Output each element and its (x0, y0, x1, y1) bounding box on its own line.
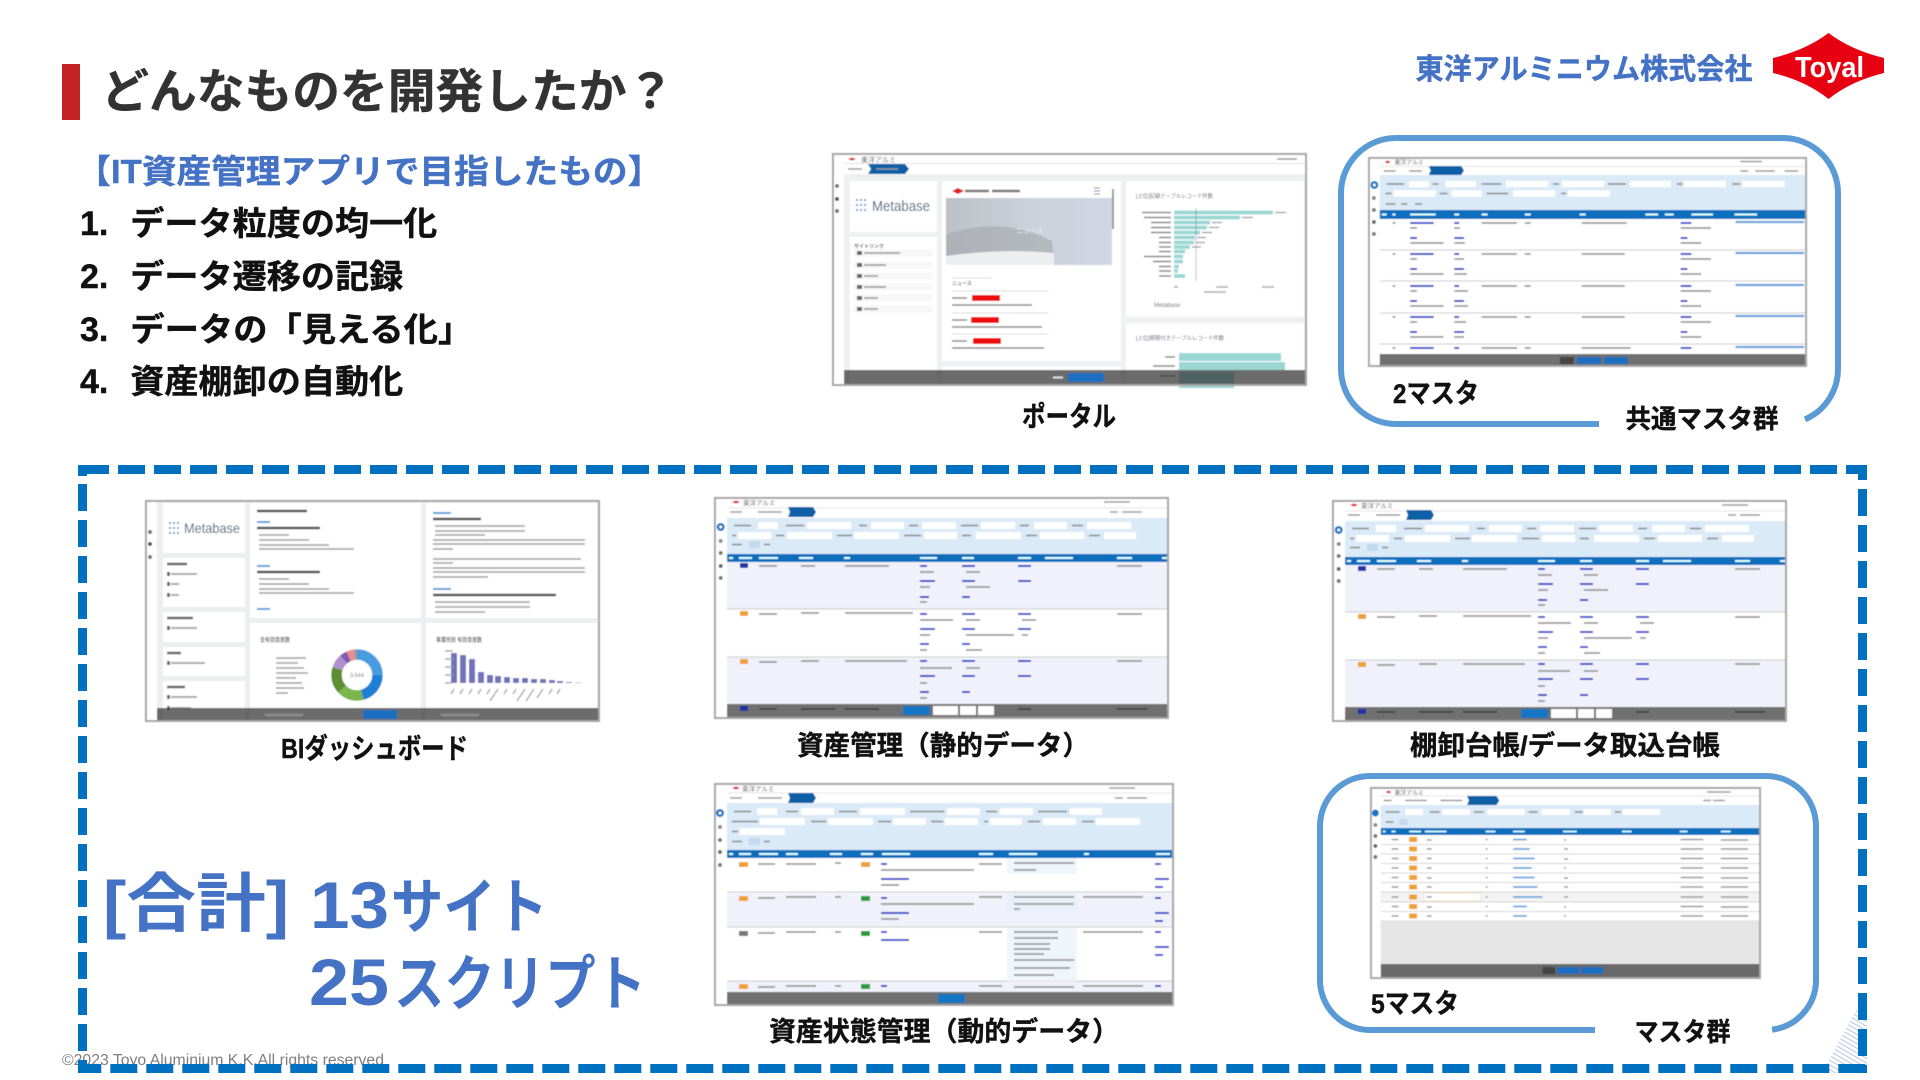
screenshot: asset status management: 東洋アルミ (742, 784, 774, 793)
portal footer overlay (844, 370, 1307, 385)
screenshot: employee master: 東洋アルミ (1394, 158, 1424, 167)
label: asset status management: 資産状態管理（動的データ） (769, 1016, 1119, 1047)
dashboard footer overlay (157, 708, 600, 722)
screenshot: BI dashboard (145, 500, 600, 722)
chart: record counts: Metabase (1154, 303, 1181, 309)
label: inventory ledger: 棚卸台帳/データ取込台帳 (1410, 730, 1720, 761)
chart: total effective assets donut: 3,544 (350, 673, 364, 679)
screenshot: asset management (714, 497, 1169, 719)
chart: period table counts: [上位]期限付きテーブルレコード件数 (1136, 334, 1224, 342)
chart: period table counts (1126, 323, 1304, 386)
screenshot: inventory ledger: 東洋アルミ (1361, 501, 1393, 510)
site links card: サイトリンク (854, 243, 884, 250)
chart: total effective assets donut: 全有効資産数 (260, 636, 290, 644)
screenshot: asset management: 東洋アルミ (743, 498, 775, 507)
news card: ニュース (1016, 227, 1044, 235)
chart: assets by site bars (426, 623, 597, 722)
icon: Toyal logo: Toyal (1795, 52, 1864, 84)
news card: ニュース (952, 281, 972, 287)
panel: dashed border (78, 465, 1867, 1073)
goal 3: 3. (80, 311, 108, 349)
25 scripts: スクリプト (394, 951, 646, 1018)
label: master group: マスタ群 (1634, 1017, 1730, 1047)
panel: asset management (714, 497, 1169, 761)
total label: [合計] (103, 868, 289, 940)
chart: record counts: [上位]記録テーブルレコード件数 (1136, 192, 1213, 200)
callout: total 13 sites 25 scripts (103, 868, 646, 1019)
label: 2 masters: 2マスタ (1393, 379, 1479, 409)
screenshot: inventory ledger (1332, 500, 1787, 722)
goal 4: 資産棚卸の自動化 (130, 363, 403, 400)
title: どんなものを開発したか？ (101, 65, 674, 118)
requests card (426, 503, 597, 618)
subtitle: 【IT資産管理アプリで目指したもの】 (76, 153, 662, 190)
label: 5 masters: 5マスタ (1371, 989, 1459, 1019)
goal 2: データ遷移の記録 (130, 258, 403, 295)
navigation cards (163, 558, 245, 722)
goals list (80, 205, 472, 401)
25 scripts: 25 (309, 945, 389, 1019)
screenshot: asset type master: 東洋アルミ (1395, 789, 1424, 797)
Metabase card: Metabase (872, 199, 930, 215)
panel: asset status management (714, 783, 1174, 1047)
panel: masters (1320, 776, 1816, 1047)
panel: BI dashboard (145, 500, 600, 764)
goal 3: データの「見える化」 (130, 311, 472, 348)
timeline card (250, 503, 421, 618)
chart: total effective assets donut (250, 623, 421, 722)
goal 4: 4. (80, 363, 108, 401)
screenshot: employee master (1368, 157, 1807, 367)
chart: assets by site bars: 事業所別 有効資産数 (436, 636, 482, 644)
site links card (850, 237, 937, 386)
rounded frame (1341, 138, 1838, 424)
panel: inventory ledger (1332, 500, 1787, 761)
Metabase card (850, 181, 937, 232)
panel: portal (832, 153, 1307, 432)
13 sites: 13 (310, 868, 389, 942)
label: BI dashboard: BIダッシュボード (281, 732, 468, 764)
icon: Toyal logo (1773, 33, 1884, 99)
screenshot: asset type master (1370, 787, 1761, 979)
Metabase card: Metabase (184, 520, 240, 536)
Metabase card (163, 503, 245, 553)
goal 1: 1. (80, 205, 108, 243)
13 sites (310, 868, 548, 942)
screenshot: portal (832, 153, 1307, 386)
goal 2: 2. (80, 258, 108, 296)
rounded frame (1320, 776, 1816, 1030)
title accent bar (62, 64, 80, 120)
screenshot: asset status management (714, 783, 1174, 1006)
panel: common masters (1341, 138, 1838, 434)
label: common master group: 共通マスタ群 (1626, 404, 1778, 434)
label: portal: ポータル (1022, 401, 1116, 432)
company name: 東洋アルミニウム株式会社 (1416, 53, 1752, 86)
goal 1: データ粒度の均一化 (130, 205, 437, 242)
screenshot: portal: 東洋アルミ (861, 155, 896, 164)
25 scripts (309, 945, 646, 1019)
copyright: ©2023 Toyo Aluminium K.K.All rights reserved (62, 1052, 384, 1069)
chart: record counts (1126, 181, 1304, 317)
label: asset management: 資産管理（静的データ） (797, 730, 1089, 761)
13 sites: サイト (391, 874, 548, 941)
news card (942, 181, 1121, 361)
